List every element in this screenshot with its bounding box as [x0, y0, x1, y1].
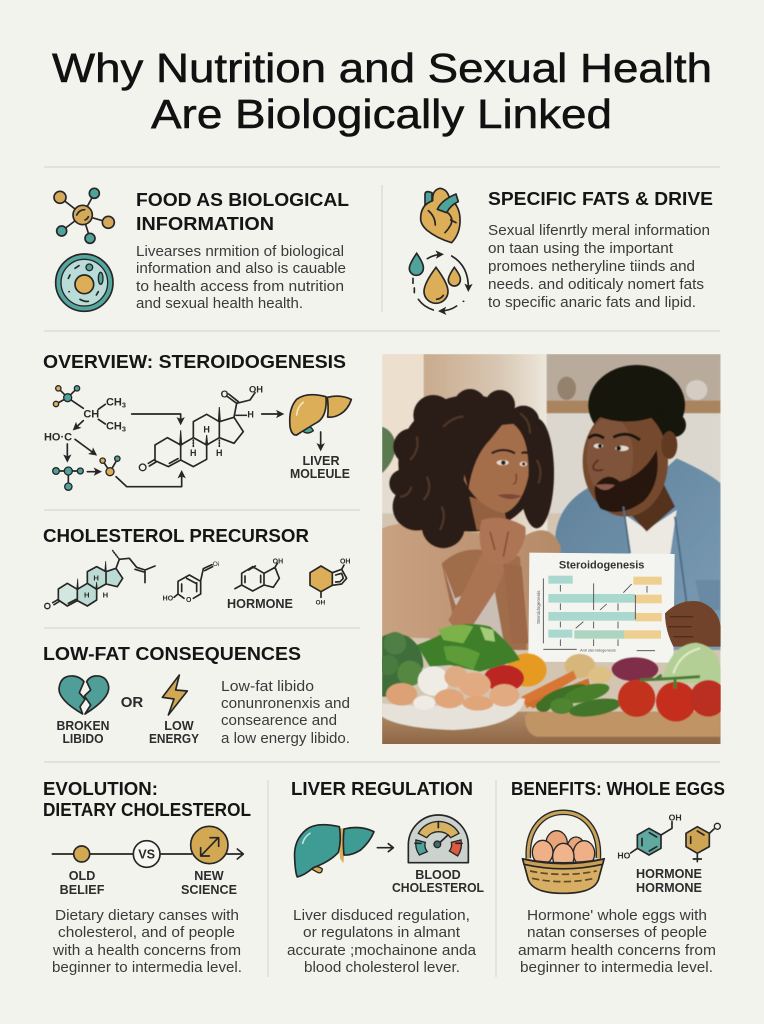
text block: amarm health concerns from	[518, 943, 716, 959]
label: broken libido	[56, 719, 110, 746]
chart held in the photo: Anti steroidogenesis	[580, 648, 616, 653]
title: Why Nutrition and Sexual Health	[52, 45, 712, 91]
label: low energy: LOW	[164, 719, 194, 733]
text block: Sexual lifenrtly meral information	[488, 223, 710, 239]
label: low energy	[149, 719, 200, 746]
label: hormone hormone	[636, 867, 702, 895]
diagram: hormone molecules: HO	[617, 850, 631, 860]
diagram: precursors to steroid: H	[216, 448, 222, 458]
text block: or regulatons in almant	[303, 925, 460, 941]
diagram: precursors to steroid: H	[247, 409, 254, 419]
text block: with a health concerns from	[52, 943, 241, 959]
diagram: cholesterol structure: H	[84, 590, 90, 599]
panel: specific fats and drive	[409, 188, 713, 311]
label: hormone hormone: HORMONE	[636, 881, 702, 895]
heading: INFORMATION	[136, 213, 274, 234]
icon: fat droplets cycle	[409, 253, 468, 311]
text block: Dietary dietary canses with	[55, 908, 239, 924]
icon: cell	[56, 254, 113, 311]
icon: broken heart	[59, 676, 109, 714]
label: old belief: OLD	[69, 869, 95, 883]
text block: needs. and oditicaly nomert fats	[488, 277, 704, 293]
panel: overview steroidogenesis	[43, 351, 351, 490]
text block: consearence and	[221, 713, 337, 729]
title	[52, 45, 712, 137]
text block	[287, 908, 476, 976]
text block	[488, 223, 710, 311]
woman	[382, 389, 561, 650]
icon: teal liver	[295, 825, 374, 877]
label: broken libido: BROKEN	[56, 719, 110, 733]
label: new science: NEW	[194, 869, 224, 883]
label: hormone: HORMONE	[227, 597, 293, 611]
diagram: precursors to steroid: OH	[249, 384, 263, 394]
text block: Livearses nrmition of biological	[136, 244, 344, 260]
diagram: cholesterol structure	[45, 551, 155, 609]
diagram: gold ring hormone: OH	[340, 558, 350, 565]
text block: Liver disduced regulation,	[293, 908, 470, 924]
text block: information and also is cauable	[136, 261, 346, 277]
text block: and sexual health health.	[136, 296, 303, 312]
diagram: hormone molecules: OH	[669, 813, 682, 823]
text block: conunronenxis and	[221, 696, 350, 712]
label: low energy: ENERGY	[149, 732, 200, 746]
text block: a low energy libido.	[221, 731, 350, 747]
heading: EVOLUTION:	[43, 778, 158, 799]
chart held in the photo: Steroidogenesis	[536, 590, 541, 624]
text block: to health access from nutrition	[136, 279, 344, 295]
text block: beginner to intermedia level.	[52, 960, 242, 976]
label: or: OR	[121, 694, 143, 711]
diagram: precursors to steroid	[44, 384, 282, 490]
label: blood cholesterol: BLOOD	[415, 868, 461, 882]
text block: promoes netheryline tiinds and	[488, 259, 695, 275]
heading: CHOLESTEROL PRECURSOR	[43, 525, 309, 546]
timeline: old belief vs new science: VS	[138, 848, 155, 862]
label: old belief	[60, 869, 105, 897]
heading: SPECIFIC FATS & DRIVE	[488, 188, 713, 209]
diagram: gold ring hormone	[310, 558, 350, 607]
diagram: ring molecule with hydroxyl: Oi	[213, 561, 220, 568]
text block	[136, 244, 346, 312]
panel: low-fat consequences	[43, 643, 350, 747]
man	[555, 365, 721, 650]
timeline: old belief vs new science	[52, 826, 243, 867]
text block: accurate ;mochainone anda	[287, 943, 476, 959]
icon: anatomical heart	[421, 188, 460, 243]
panel: evolution of dietary cholesterol	[43, 778, 251, 976]
label: broken libido: LIBIDO	[62, 732, 104, 746]
panel: food as biological information	[54, 188, 349, 312]
title: Are Biologically Linked	[151, 91, 612, 137]
food on the table	[378, 624, 727, 745]
diagram: hormone molecule: OH	[273, 558, 283, 565]
chart held in the photo: Steroidogenesis	[559, 559, 644, 571]
text block: cholesterol, and of people	[58, 925, 235, 941]
diagram: precursors to steroid: CH	[83, 409, 99, 421]
text block: to specific anaric fats and lipid.	[488, 295, 696, 311]
label: blood cholesterol	[392, 868, 484, 895]
diagram: hormone molecules	[617, 813, 720, 862]
icon: liver	[290, 395, 351, 449]
icon: molecule network	[54, 188, 114, 243]
label: hormone hormone: HORMONE	[636, 867, 702, 881]
heading: LIVER REGULATION	[291, 778, 473, 799]
text block: beginner to intermedia level.	[520, 960, 713, 976]
text block	[518, 908, 716, 976]
chart held in the photo	[528, 553, 721, 663]
panel: liver regulation	[287, 778, 484, 976]
heading: BENEFITS: WHOLE EGGS	[511, 778, 725, 799]
diagram: precursors to steroid: O	[221, 389, 229, 400]
text block	[221, 679, 350, 747]
icon: lightning bolt	[162, 675, 187, 715]
text block: Hormone' whole eggs with	[527, 908, 707, 924]
label: new science: SCIENCE	[181, 883, 237, 897]
heading: FOOD AS BIOLOGICAL	[136, 189, 349, 210]
label: liver molecule	[290, 454, 350, 481]
panel: benefits of whole eggs	[511, 778, 725, 976]
heading	[136, 189, 349, 234]
label: liver molecule: MOLEULE	[290, 467, 350, 481]
diagram: hormone molecule	[235, 558, 283, 591]
diagram: ring molecule with hydroxyl: O	[186, 597, 192, 604]
icon: blood cholesterol gauge	[408, 815, 468, 863]
heading: LOW-FAT CONSEQUENCES	[43, 643, 301, 664]
arrow: liver to blood cholesterol	[377, 844, 393, 852]
text block: on taan using the important	[488, 241, 673, 257]
diagram: precursors to steroid: CH	[106, 420, 122, 432]
diagram: gold ring hormone: OH	[316, 600, 326, 607]
label: blood cholesterol: CHOLESTEROL	[392, 881, 484, 895]
diagram: precursors to steroid: 3	[122, 400, 126, 409]
label: liver molecule: LIVER	[302, 454, 340, 468]
kitchen background	[382, 354, 721, 744]
heading: DIETARY CHOLESTEROL	[43, 799, 251, 820]
label: old belief: BELIEF	[60, 883, 105, 897]
text block: blood cholesterol lever.	[304, 960, 460, 976]
heading: OVERVIEW: STEROIDOGENESIS	[43, 351, 346, 372]
diagram: precursors to steroid: CH	[106, 396, 122, 408]
diagram: precursors to steroid: H	[190, 448, 196, 458]
diagram: cholesterol structure: H	[93, 574, 99, 583]
text block: Low-fat libido	[221, 679, 314, 695]
photo: couple with steroidogenesis chart and healthy food	[378, 354, 727, 745]
diagram: ring molecule with hydroxyl: HO	[163, 596, 174, 603]
diagram: ring molecule with hydroxyl	[163, 561, 220, 604]
text block	[52, 908, 242, 976]
icon: egg basket	[523, 812, 604, 893]
diagram: cholesterol structure: H	[103, 590, 109, 599]
diagram: precursors to steroid: 3	[122, 424, 126, 433]
text block: natan conserses of people	[527, 925, 707, 941]
diagram: precursors to steroid: H	[203, 424, 210, 434]
label: new science	[181, 869, 237, 897]
panel: cholesterol precursor	[43, 525, 350, 611]
diagram: precursors to steroid: HO·C	[44, 431, 72, 443]
heading	[43, 778, 251, 820]
